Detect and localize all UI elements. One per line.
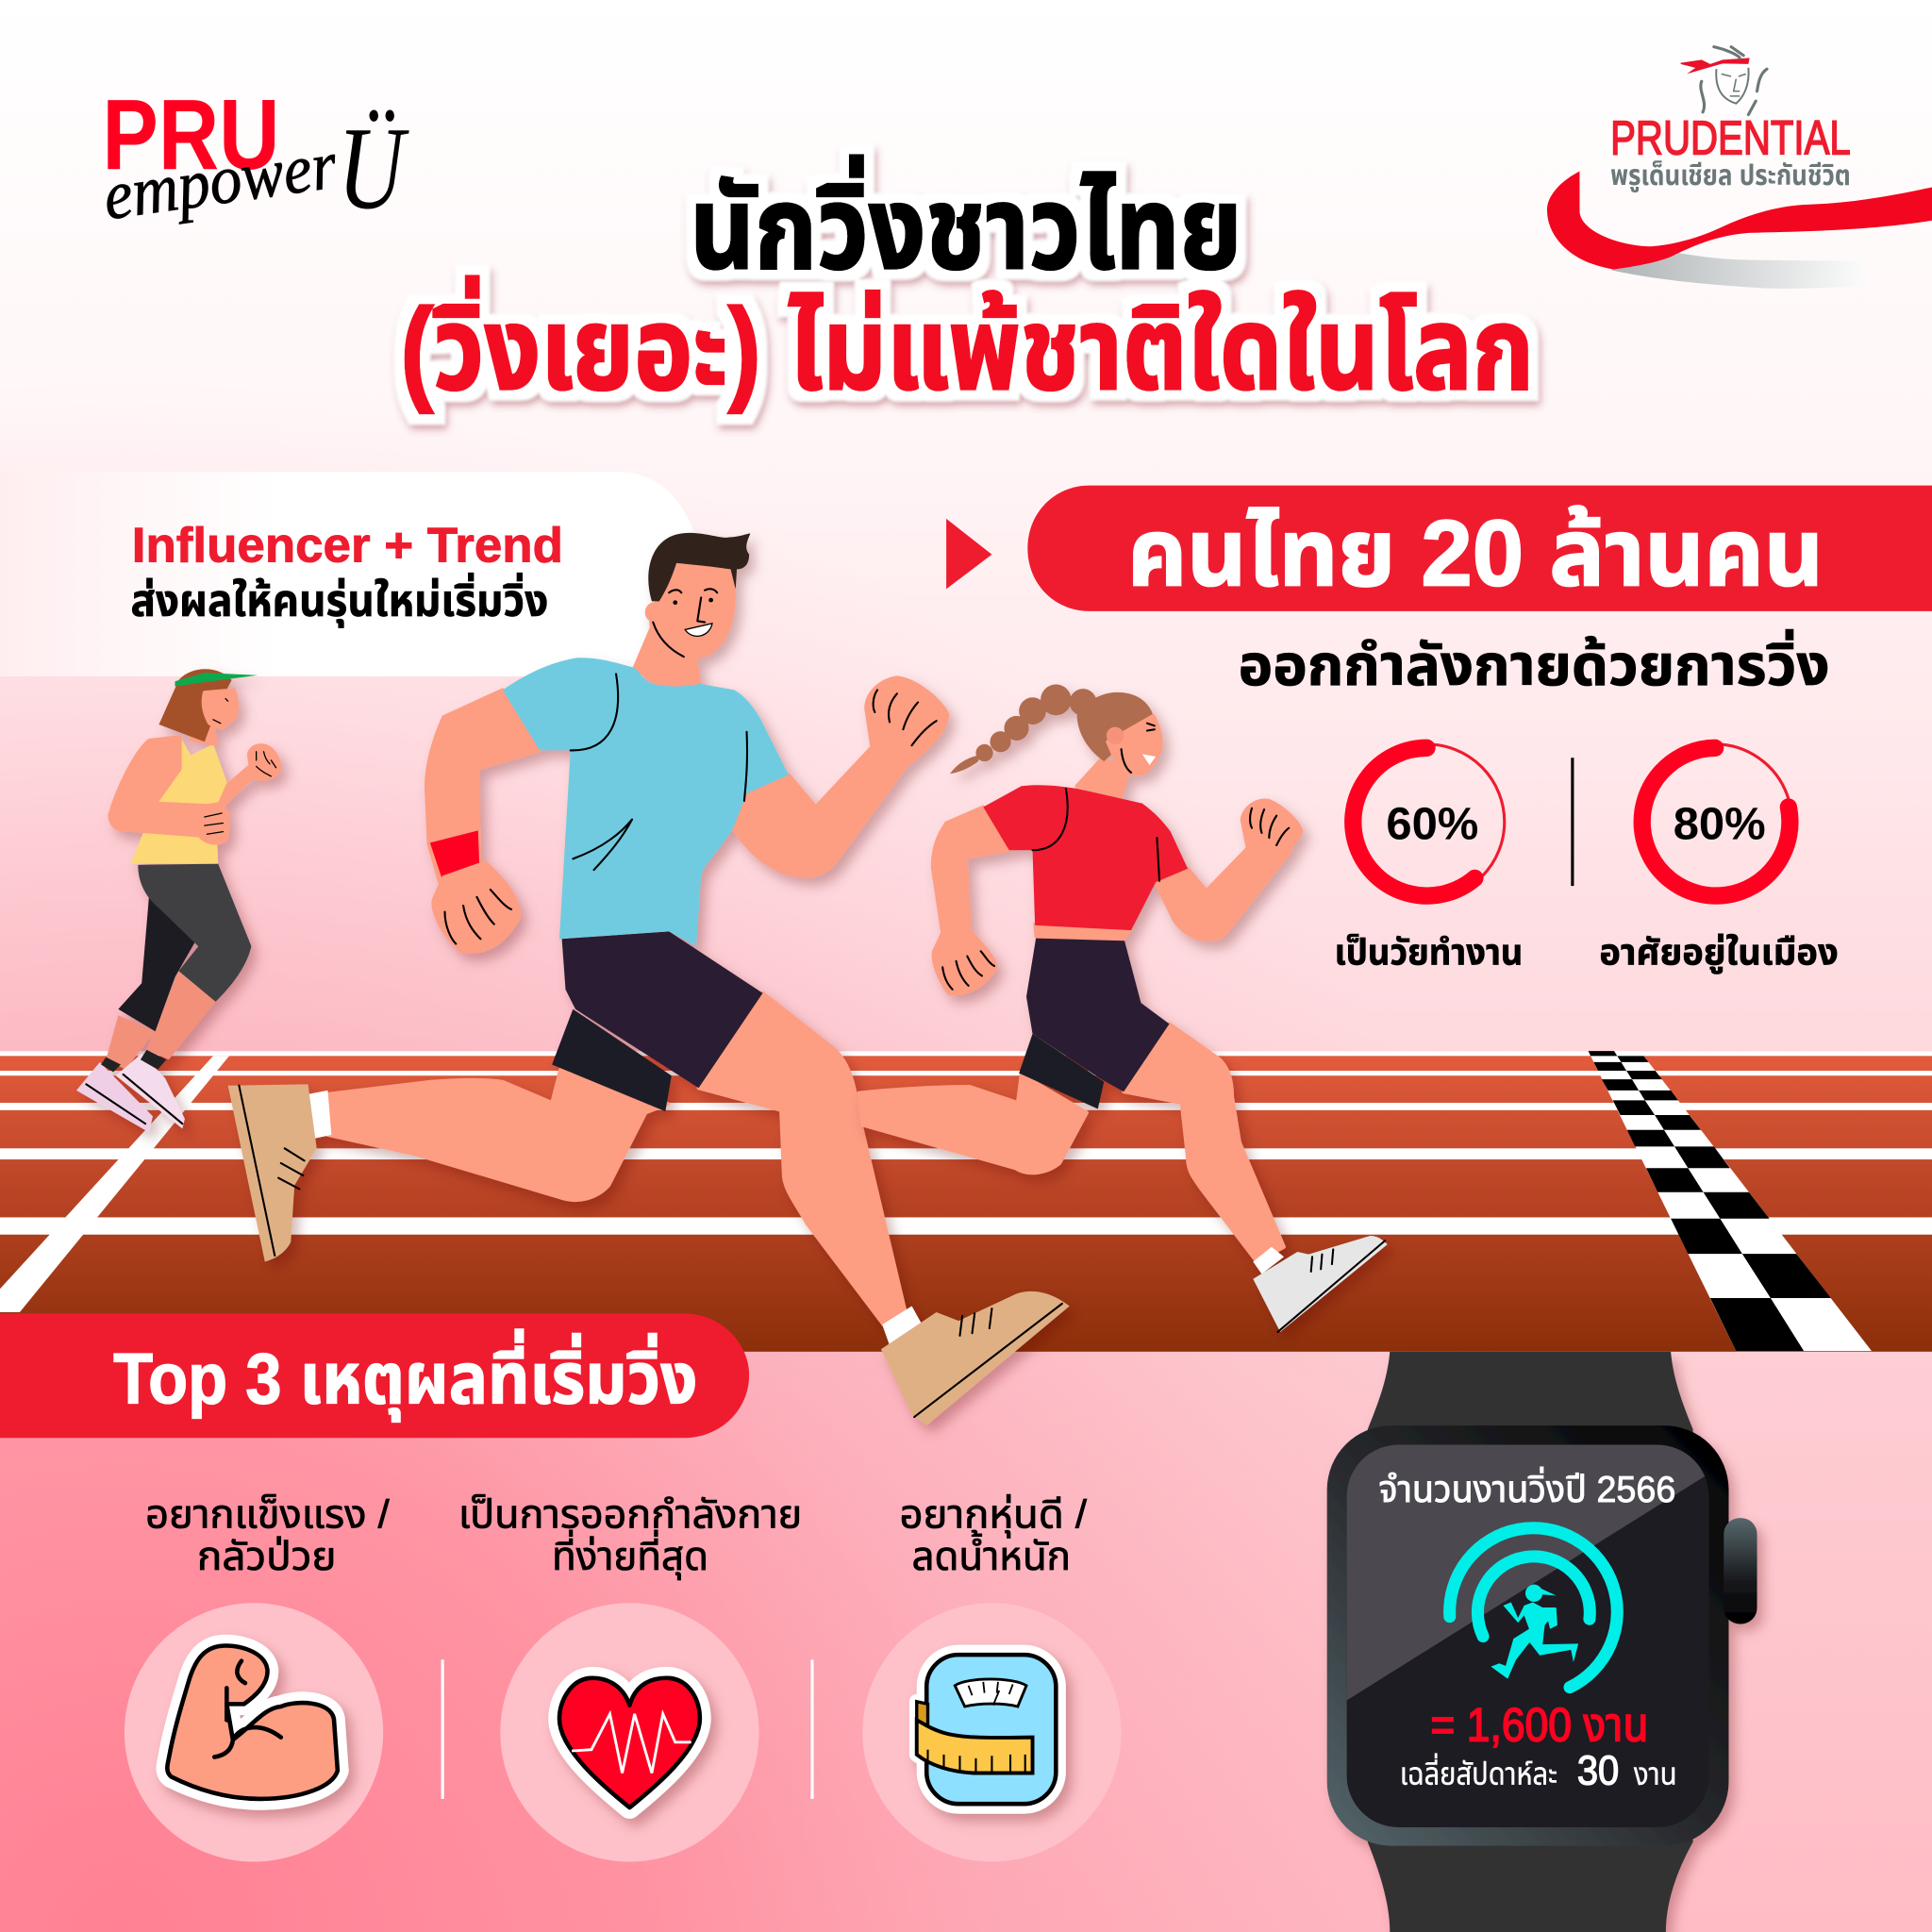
small runner with visor [76,669,279,1132]
label: working age: เป็นวัยทำงาน [1335,934,1523,974]
smartwatch [1327,1352,1757,1932]
logo: PRU empower U: Ü [338,104,409,235]
front arm and fist [1156,801,1301,940]
face [1107,716,1161,774]
donut chart 60% [1349,744,1505,899]
neck [635,627,700,688]
red banner: 20 million [1027,486,1932,611]
top 3 red banner: Top 3 เหตุผลที่เริ่มวิ่ง [113,1328,697,1423]
donut chart 80%: 80% [1674,798,1766,849]
total events: = 1,600 งาน [1430,1699,1649,1752]
weekly average: งาน [1634,1756,1677,1790]
donut chart 80% [1642,744,1790,896]
reason 2 text [458,1492,802,1580]
Prudential Thai name: พรูเด็นเชียล ประกันชีวิต [1610,159,1851,192]
ponytail braid [950,685,1096,774]
icon: scale and tape [917,1655,1056,1804]
female runner in red [858,685,1388,1332]
watch case [1327,1425,1728,1846]
back arm and fist [933,808,1009,993]
weekly average: 30 [1577,1748,1619,1793]
reason 2 circle [500,1603,759,1862]
shorts [562,931,762,1088]
influencer text block: ส่งผลให้คนรุ่นใหม่เริ่มวิ่ง [130,573,548,628]
small runner lower fist [200,804,228,842]
Prudential wordmark: PRUDENTIAL [1610,110,1851,164]
neck [1077,759,1128,797]
red swoosh ribbon [1547,172,1932,270]
hair [1077,692,1154,761]
arrow [946,519,991,589]
reason 2 text: เป็นการออกกำลังกาย [458,1492,802,1537]
reason 1 text: อยากแข็งแรง / [145,1492,390,1537]
small runner front fist [249,745,279,779]
title line 2: (วิ่งเยอะ) ไม่แพ้ชาติใดในโลก [400,275,1534,415]
top 3 red banner [0,1313,749,1438]
logo: PRU empower U: PRU [102,79,279,191]
watch heading: จำนวนงานวิ่งปี 2566 [1379,1466,1675,1510]
watch crown [1724,1518,1757,1624]
running track [0,1051,1932,1352]
logo: PRU empower U [99,79,409,235]
separator [441,1659,444,1799]
watch band [1368,1352,1693,1932]
red banner: 20 million: คนไทย 20 ล้านคน [1127,501,1824,606]
reason 1 text: กลัวป่วย [197,1534,337,1578]
big male runner [228,533,1070,1425]
icon: heart with pulse [559,1678,700,1807]
front arm and fist [734,677,947,876]
inner shorts [552,1009,672,1111]
reason 2 text: ที่ง่ายที่สุด [552,1529,708,1580]
weekly average: เฉลี่ยสัปดาห์ละ [1400,1753,1557,1790]
reason 3 text: ลดน้ำหนัก [912,1529,1071,1578]
waist [1035,924,1131,939]
logo: Prudential [1547,47,1932,289]
back leg and shoe [228,1070,668,1261]
reason 2: easiest exercise [458,1492,802,1862]
white capsule behind influencer text [0,472,697,676]
gray ribbon shadow [1610,253,1863,289]
label: urban: อาศัยอยู่ในเมือง [1599,934,1839,974]
reason 3 text [899,1492,1087,1578]
Prudential head icon [1681,47,1767,114]
back leg [858,1074,1087,1173]
banner subtitle: ออกกำลังกายด้วยการวิ่ง [1239,629,1830,697]
donut chart 60%: 60% [1386,798,1478,849]
divider [1571,758,1574,886]
watch screen [1347,1444,1709,1827]
reason 1: strong [125,1492,390,1862]
reason 1 circle [125,1603,383,1862]
reason 1 text [145,1492,390,1578]
front leg and shoe [1124,1024,1388,1332]
influencer text block [130,519,563,628]
influencer text block: Influencer + Trend [132,519,563,574]
weekly average [1400,1748,1677,1793]
front leg and shoe [699,993,1070,1425]
title line 1: นักวิ่งชาวไทย [690,155,1242,294]
reason 3 text: อยากหุ่นดี / [899,1492,1087,1539]
head [647,533,750,657]
title [400,155,1534,415]
shorts [1019,1034,1104,1109]
reason 3: good shape [862,1492,1122,1862]
reason 3 circle [862,1603,1122,1862]
icon: flexed muscle [167,1645,338,1799]
t-shirt [503,658,789,946]
activity rings and runner [1450,1528,1617,1688]
red shirt [983,785,1188,930]
logo: PRU empower U: empower [99,126,341,234]
back arm and fist [426,690,540,952]
checkered finish line [1589,1051,1872,1351]
separator [810,1659,814,1799]
